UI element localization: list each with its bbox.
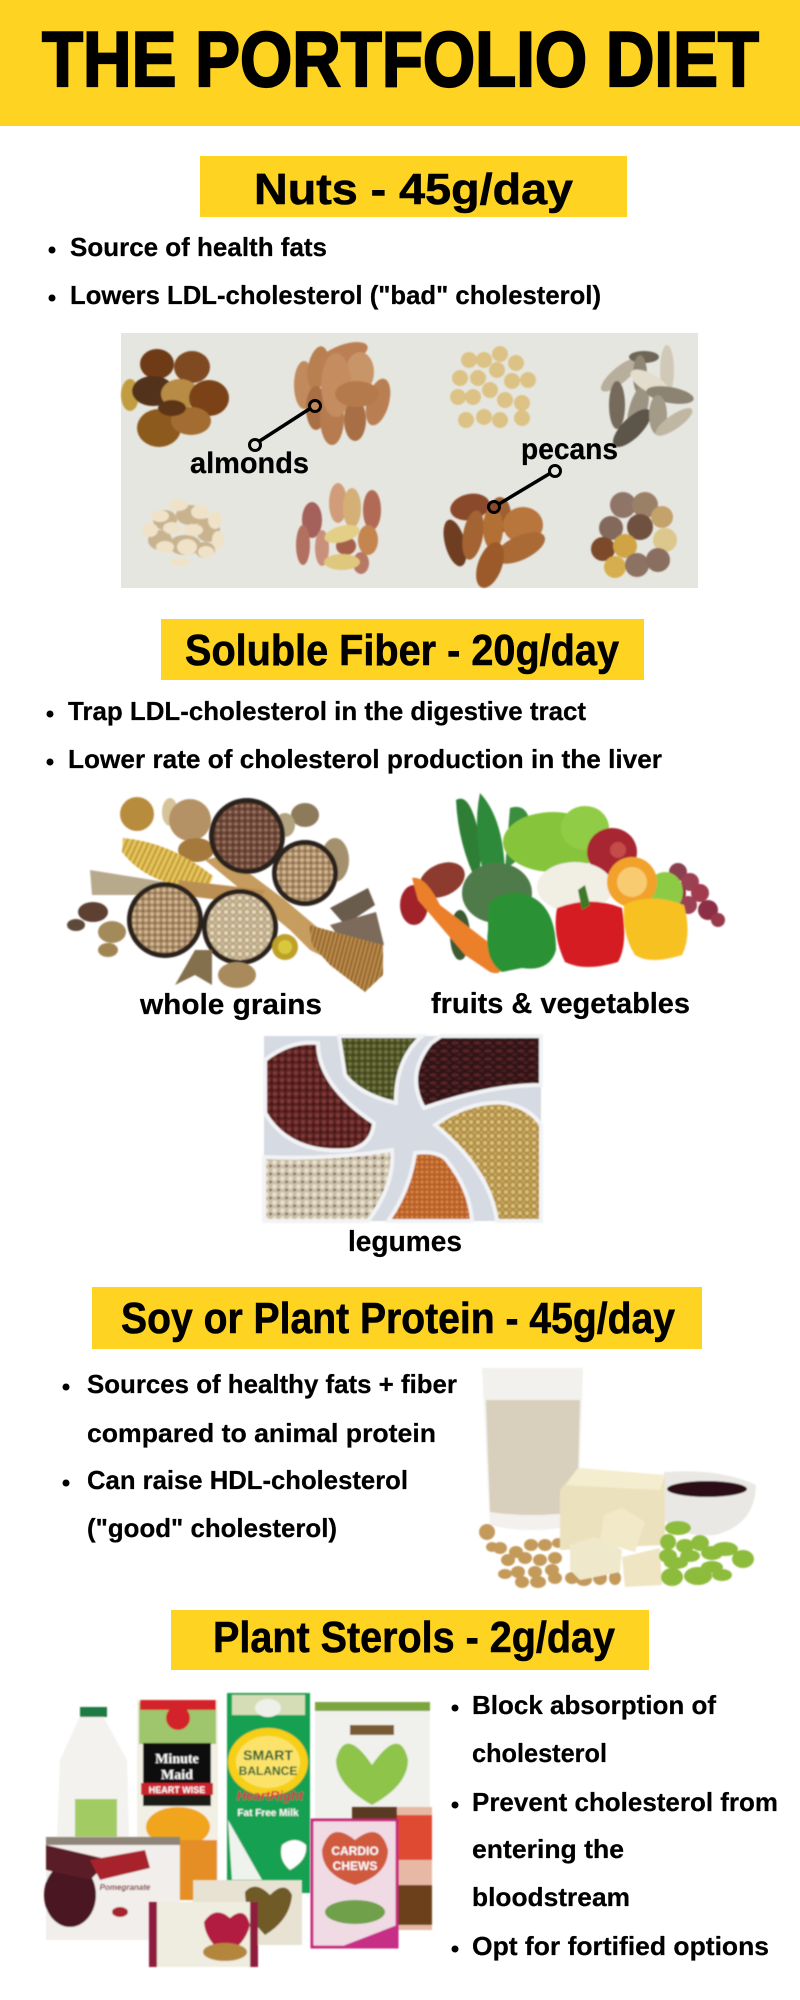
label: whole grains: whole grains bbox=[139, 989, 322, 1021]
Cardio Chews pouch bbox=[312, 1820, 397, 1947]
bullet list: sterol benefits: Opt for fortified options bbox=[472, 1931, 769, 1961]
photo: legumes bbox=[264, 1036, 541, 1221]
orange lentil bowl bbox=[388, 1152, 472, 1221]
callout: pecans: pecans bbox=[521, 433, 618, 466]
title banner bbox=[0, 0, 800, 126]
photo: fruits and vegetables bbox=[400, 793, 725, 973]
right scoops bbox=[330, 888, 375, 925]
heading: plant sterols: Plant Sterols - 2g/day bbox=[213, 1613, 615, 1662]
icon: sunflower seed pile bbox=[596, 345, 696, 453]
bullet list: fiber benefits bbox=[46, 696, 662, 774]
oil jar bbox=[272, 934, 298, 960]
callout: almonds bbox=[190, 400, 320, 480]
kidney beans bowl bbox=[416, 1036, 541, 1108]
Minute Maid carton bbox=[137, 1700, 218, 1900]
Smart Balance carton: SMART bbox=[243, 1747, 293, 1763]
bullet list: protein benefits: compared to animal protein bbox=[87, 1418, 436, 1448]
icon: almond pile bbox=[294, 337, 395, 445]
heading: soy or plant protein: Soy or Plant Protein - 45g/day bbox=[121, 1294, 675, 1343]
oatmeal bars bbox=[149, 1880, 302, 1967]
soy sauce bowl bbox=[664, 1471, 756, 1535]
heading: soluble fiber: Soluble Fiber - 20g/day bbox=[185, 626, 619, 675]
brown bag behind Cardio Chews bbox=[352, 1807, 432, 1930]
edamame bbox=[659, 1521, 754, 1586]
photo panel: nuts bbox=[121, 333, 698, 592]
tofu block bbox=[560, 1468, 665, 1550]
left scoop bbox=[90, 870, 165, 895]
bullet list: sterol benefits: Prevent cholesterol from bbox=[472, 1787, 778, 1817]
seed pile bbox=[218, 962, 256, 988]
icon: peanut pile bbox=[296, 483, 381, 574]
bullet list: protein benefits: ("good" cholesterol) bbox=[87, 1513, 337, 1543]
Minute Maid carton: Minute bbox=[155, 1752, 199, 1767]
bullet list: protein benefits: Sources of healthy fats + fiber bbox=[87, 1369, 457, 1399]
bowls bbox=[209, 798, 285, 874]
icon: chestnut pile bbox=[121, 349, 229, 447]
bullet list: sterol benefits: Block absorption of bbox=[472, 1690, 716, 1720]
Cardio Chews pouch: CARDIO bbox=[331, 1844, 379, 1858]
tofu cubes bbox=[600, 1508, 645, 1552]
Pomegranate box: Pomegranate bbox=[100, 1883, 151, 1892]
icon: pale seed pile bbox=[142, 499, 224, 566]
bullet list: sterol benefits bbox=[452, 1690, 778, 1961]
callout: almonds: almonds bbox=[190, 447, 309, 480]
Smart Balance carton: HeartRight bbox=[237, 1788, 304, 1803]
heading: nuts: Nuts - 45g/day bbox=[254, 165, 574, 214]
Pomegranate box bbox=[44, 1837, 180, 1940]
bullet list: sterol benefits: entering the bbox=[472, 1834, 624, 1864]
bullet list: sterol benefits: bloodstream bbox=[472, 1882, 630, 1912]
soybeans bbox=[479, 1524, 621, 1588]
penne pile bbox=[205, 855, 350, 960]
photo: soy products bbox=[479, 1368, 756, 1588]
red beans bowl bbox=[265, 1043, 374, 1151]
bullet list: protein benefits bbox=[62, 1369, 457, 1543]
spaghetti bbox=[309, 925, 383, 992]
Minute Maid carton: HEART WISE bbox=[149, 1785, 205, 1795]
green mung bowl bbox=[339, 1036, 422, 1103]
pouch bbox=[315, 1702, 430, 1822]
bullet list: fiber benefits: Lower rate of cholesterol production in the liver bbox=[68, 744, 662, 774]
label: legumes: legumes bbox=[348, 1226, 462, 1258]
Smart Balance carton bbox=[227, 1693, 310, 1893]
callout: pecans bbox=[488, 433, 618, 512]
glass of soy milk bbox=[482, 1368, 583, 1530]
icon: pecan pile bbox=[439, 490, 550, 592]
label: fruits and vegetables: fruits & vegetables bbox=[431, 988, 690, 1020]
Smart Balance carton: BALANCE bbox=[239, 1764, 297, 1778]
Minute Maid carton: Maid bbox=[161, 1768, 193, 1783]
jars and scoops, back bbox=[120, 797, 154, 831]
icon: chickpea pile bbox=[450, 346, 536, 428]
wheat bbox=[175, 950, 212, 985]
bullet list: nuts benefits: Source of health fats bbox=[70, 232, 327, 262]
Smart Balance carton: Fat Free Milk bbox=[237, 1808, 299, 1819]
corn bbox=[122, 838, 213, 888]
milk jug bbox=[57, 1707, 129, 1837]
heading: nuts bbox=[200, 156, 627, 217]
bullet list: nuts benefits: Lowers LDL-cholesterol ("bad" cholesterol) bbox=[70, 280, 601, 310]
bullet list: nuts benefits bbox=[48, 232, 601, 310]
photo: whole grains bbox=[67, 797, 384, 992]
photo: fortified products bbox=[44, 1693, 432, 1967]
bullet list: protein benefits: Can raise HDL-cholesterol bbox=[87, 1465, 408, 1495]
bullet list: fiber benefits: Trap LDL-cholesterol in the digestive tract bbox=[68, 696, 586, 726]
icon: hazelnut pile bbox=[591, 492, 677, 578]
white beans bowl bbox=[264, 1150, 392, 1221]
yellow peas bowl bbox=[435, 1103, 541, 1221]
bullet list: sterol benefits: cholesterol bbox=[472, 1738, 607, 1768]
Cardio Chews pouch: CHEWS bbox=[333, 1859, 377, 1873]
small scoops left bbox=[78, 902, 108, 922]
